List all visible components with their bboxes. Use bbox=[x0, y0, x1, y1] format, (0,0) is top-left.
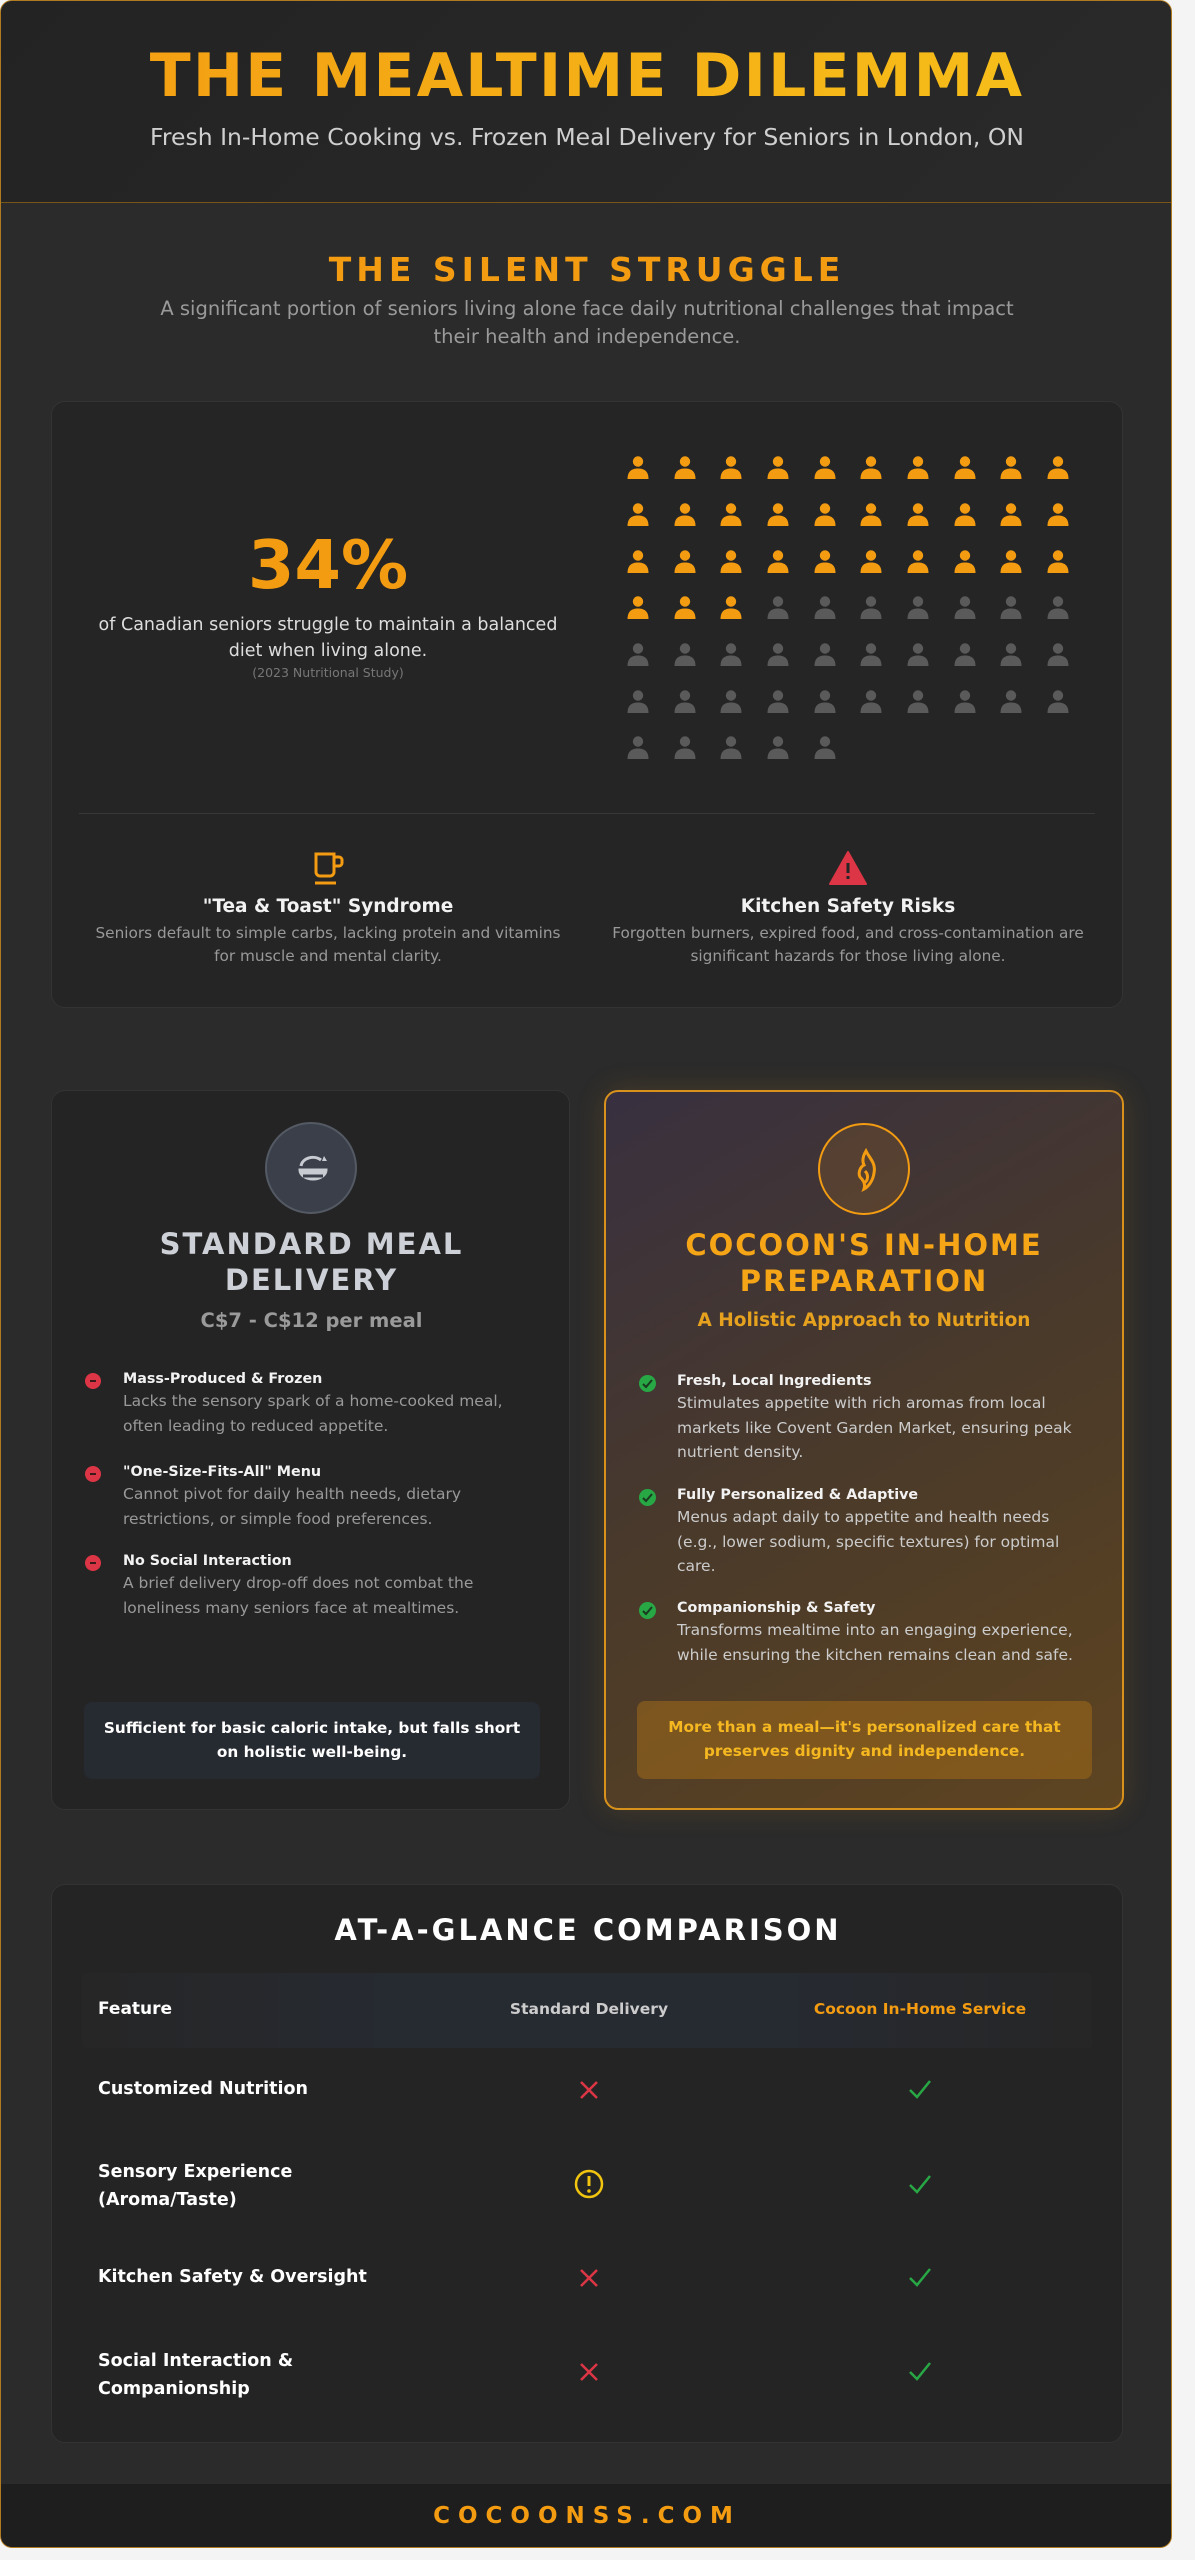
panel: comparison table bbox=[51, 1884, 1123, 2443]
panel: statistics bbox=[51, 401, 1123, 1008]
feature: kitchen safety bbox=[612, 851, 1084, 965]
heading: PREPARATION bbox=[740, 1264, 988, 1298]
stat: 34%: diet when living alone. bbox=[229, 641, 427, 661]
heading: COCOON'S IN-HOME bbox=[685, 1228, 1043, 1262]
section heading: silent struggle: THE SILENT STRUGGLE bbox=[329, 250, 845, 289]
stat: 34% bbox=[99, 526, 557, 680]
item: mass-produced: Lacks the sensory spark of a home-cooked meal, bbox=[123, 1392, 503, 1410]
feature: tea & toast bbox=[95, 852, 561, 965]
item: no social interaction: No Social Interaction bbox=[123, 1553, 292, 1569]
heading: AT-A-GLANCE COMPARISON bbox=[334, 1913, 842, 1947]
heading bbox=[160, 1227, 463, 1297]
icon: chef flame bbox=[818, 1123, 910, 1215]
row: sensory experience: (Aroma/Taste) bbox=[98, 2190, 237, 2210]
row: social interaction bbox=[98, 2351, 931, 2399]
heading: DELIVERY bbox=[225, 1263, 398, 1297]
panel: standard meal delivery bbox=[51, 1090, 570, 1810]
heading: STANDARD MEAL bbox=[160, 1227, 463, 1261]
item: no social interaction: loneliness many seniors face at mealtimes. bbox=[123, 1598, 459, 1616]
feature: tea & toast: Seniors default to simple carbs, lacking protein and vitamins bbox=[95, 924, 561, 942]
item: mass-produced: Mass-Produced & Frozen bbox=[123, 1371, 322, 1387]
footer bbox=[1, 2484, 1173, 2549]
callout: verdict: on holistic well-being. bbox=[217, 1743, 407, 1761]
subtitle: Fresh In-Home Cooking vs. Frozen Meal Delivery for Seniors in London, ON bbox=[150, 123, 1024, 151]
item: one-size-fits-all: "One-Size-Fits-All" Menu bbox=[123, 1464, 321, 1480]
heading bbox=[685, 1228, 1043, 1298]
table header row bbox=[82, 1973, 1092, 2048]
item: personalized: (e.g., lower sodium, specific textures) for optimal bbox=[677, 1532, 1059, 1550]
row: sensory experience bbox=[98, 2162, 931, 2210]
row: sensory experience: Sensory Experience bbox=[98, 2162, 292, 2182]
table header row: Cocoon In-Home Service bbox=[814, 2000, 1026, 2018]
row: kitchen safety bbox=[98, 2267, 931, 2287]
stat: 34%: (2023 Nutritional Study) bbox=[252, 665, 404, 680]
feature: tea & toast: for muscle and mental clarity. bbox=[214, 947, 442, 965]
chart: person icon grid (34 of 100) bbox=[628, 456, 1068, 759]
section intro text: A significant portion of seniors living alone face daily nutritional challenges that impact bbox=[160, 297, 1014, 320]
stat: 34%: of Canadian seniors struggle to maintain a balanced bbox=[99, 615, 557, 635]
item: mass-produced: often leading to reduced appetite. bbox=[123, 1416, 388, 1434]
callout: value: preserves dignity and independence. bbox=[704, 1742, 1025, 1760]
callout: value bbox=[637, 1701, 1092, 1779]
table header row: Standard Delivery bbox=[510, 2000, 668, 2018]
section intro text: their health and independence. bbox=[434, 325, 740, 348]
callout: verdict bbox=[84, 1702, 540, 1779]
footer: COCOONSS.COM bbox=[433, 2503, 741, 2529]
stat: 34%: 34% bbox=[248, 526, 408, 604]
feature: kitchen safety: Kitchen Safety Risks bbox=[741, 896, 955, 917]
item: companionship bbox=[639, 1600, 1073, 1664]
icon: warning triangle bbox=[829, 851, 867, 885]
item: one-size-fits-all bbox=[85, 1464, 461, 1528]
row: kitchen safety: Kitchen Safety & Oversight bbox=[98, 2267, 367, 2287]
icon: mug bbox=[314, 852, 344, 884]
item: personalized: Menus adapt daily to appetite and health needs bbox=[677, 1508, 1049, 1526]
callout: value: More than a meal—it's personalized care that bbox=[668, 1718, 1061, 1736]
feature: tea & toast: "Tea & Toast" Syndrome bbox=[203, 896, 453, 917]
item: mass-produced bbox=[85, 1371, 503, 1434]
item: personalized bbox=[639, 1487, 1059, 1575]
item: personalized: Fully Personalized & Adaptive bbox=[677, 1487, 918, 1503]
row: customized nutrition: Customized Nutrition bbox=[98, 2079, 308, 2099]
item: no social interaction bbox=[85, 1553, 473, 1616]
item: fresh local: Stimulates appetite with rich aromas from local bbox=[677, 1394, 1046, 1412]
item: one-size-fits-all: restrictions, or simple food preferences. bbox=[123, 1510, 432, 1528]
item: one-size-fits-all: Cannot pivot for daily health needs, dietary bbox=[123, 1485, 461, 1503]
item: companionship: Transforms mealtime into an engaging experience, bbox=[677, 1621, 1073, 1639]
item: personalized: care. bbox=[677, 1557, 716, 1575]
title: THE MEALTIME DILEMMA bbox=[150, 41, 1024, 111]
table header row: Feature bbox=[98, 1999, 172, 2019]
item: companionship: while ensuring the kitchen remains clean and safe. bbox=[677, 1646, 1073, 1664]
item: fresh local bbox=[639, 1373, 1072, 1461]
item: no social interaction: A brief delivery drop-off does not combat the bbox=[123, 1574, 473, 1592]
price: C$7 - C$12 per meal bbox=[201, 1309, 422, 1332]
header bbox=[1, 1, 1173, 203]
tagline: A Holistic Approach to Nutrition bbox=[698, 1310, 1030, 1331]
item: fresh local: Fresh, Local Ingredients bbox=[677, 1373, 871, 1389]
section intro text bbox=[160, 297, 1014, 348]
callout: verdict: Sufficient for basic caloric intake, but falls short bbox=[104, 1719, 520, 1737]
item: fresh local: markets like Covent Garden Market, ensuring peak bbox=[677, 1418, 1072, 1436]
row: social interaction: Social Interaction & bbox=[98, 2351, 293, 2371]
panel: cocoon in-home preparation bbox=[604, 1090, 1124, 1810]
row: customized nutrition bbox=[98, 2079, 931, 2099]
icon: frozen meal bbox=[265, 1122, 357, 1214]
row: social interaction: Companionship bbox=[98, 2379, 250, 2399]
item: fresh local: nutrient density. bbox=[677, 1443, 803, 1461]
feature: kitchen safety: significant hazards for those living alone. bbox=[690, 947, 1006, 965]
item: companionship: Companionship & Safety bbox=[677, 1600, 875, 1616]
feature: kitchen safety: Forgotten burners, expired food, and cross-contamination are bbox=[612, 924, 1084, 942]
